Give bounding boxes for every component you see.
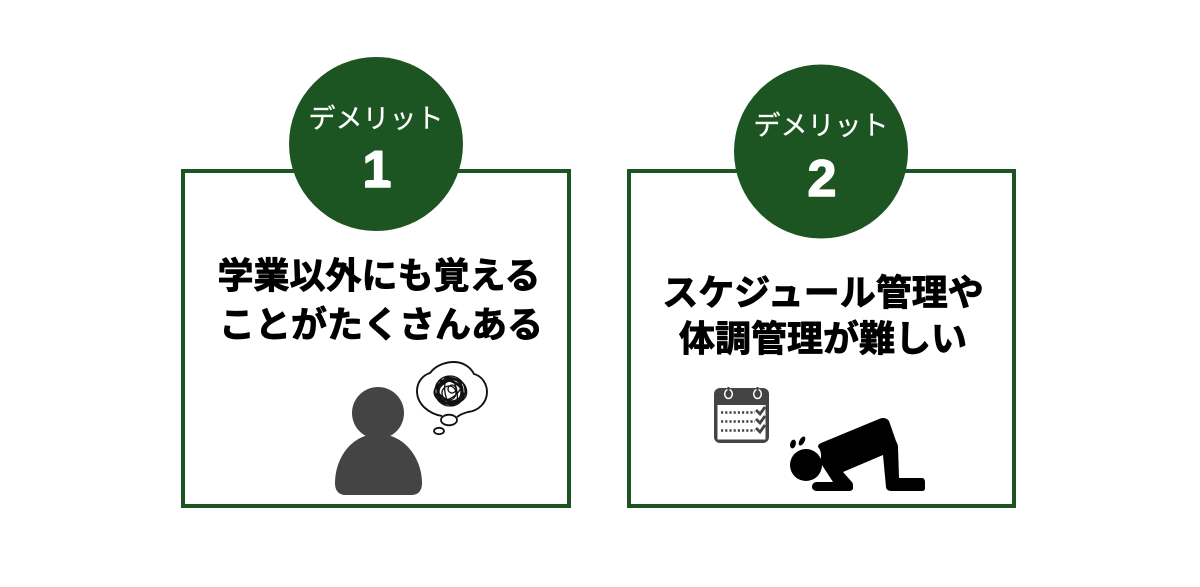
icon: thought bubble with tangled scribble xyxy=(417,362,487,434)
panel: demerit 1 xyxy=(183,57,569,506)
icon: calendar checklist xyxy=(714,387,769,443)
badge: demerit 1 xyxy=(289,57,463,231)
icon: person silhouette xyxy=(335,387,422,495)
panel frame 2 xyxy=(629,171,1014,506)
heading: demerit 2: スケジュール管理や xyxy=(662,272,984,313)
heading: demerit 1 xyxy=(218,255,543,345)
badge: demerit 2: デメリット xyxy=(754,111,888,141)
heading: demerit 1: 学業以外にも覚える xyxy=(218,255,540,296)
heading: demerit 2 xyxy=(662,272,984,359)
panel: demerit 2 xyxy=(629,64,1014,506)
panel frame 1 xyxy=(183,171,569,506)
heading: demerit 1: ことがたくさんある xyxy=(219,304,543,345)
numeral base serif xyxy=(365,180,390,187)
heading: demerit 2: 体調管理が難しい xyxy=(679,318,967,359)
badge: demerit 1: デメリット xyxy=(308,104,444,134)
badge: demerit 2 xyxy=(734,64,908,238)
icon: person kneeling in despair xyxy=(789,418,925,491)
badge: demerit 2: 2 xyxy=(808,150,836,208)
badge: demerit 1: 1 xyxy=(363,141,391,199)
